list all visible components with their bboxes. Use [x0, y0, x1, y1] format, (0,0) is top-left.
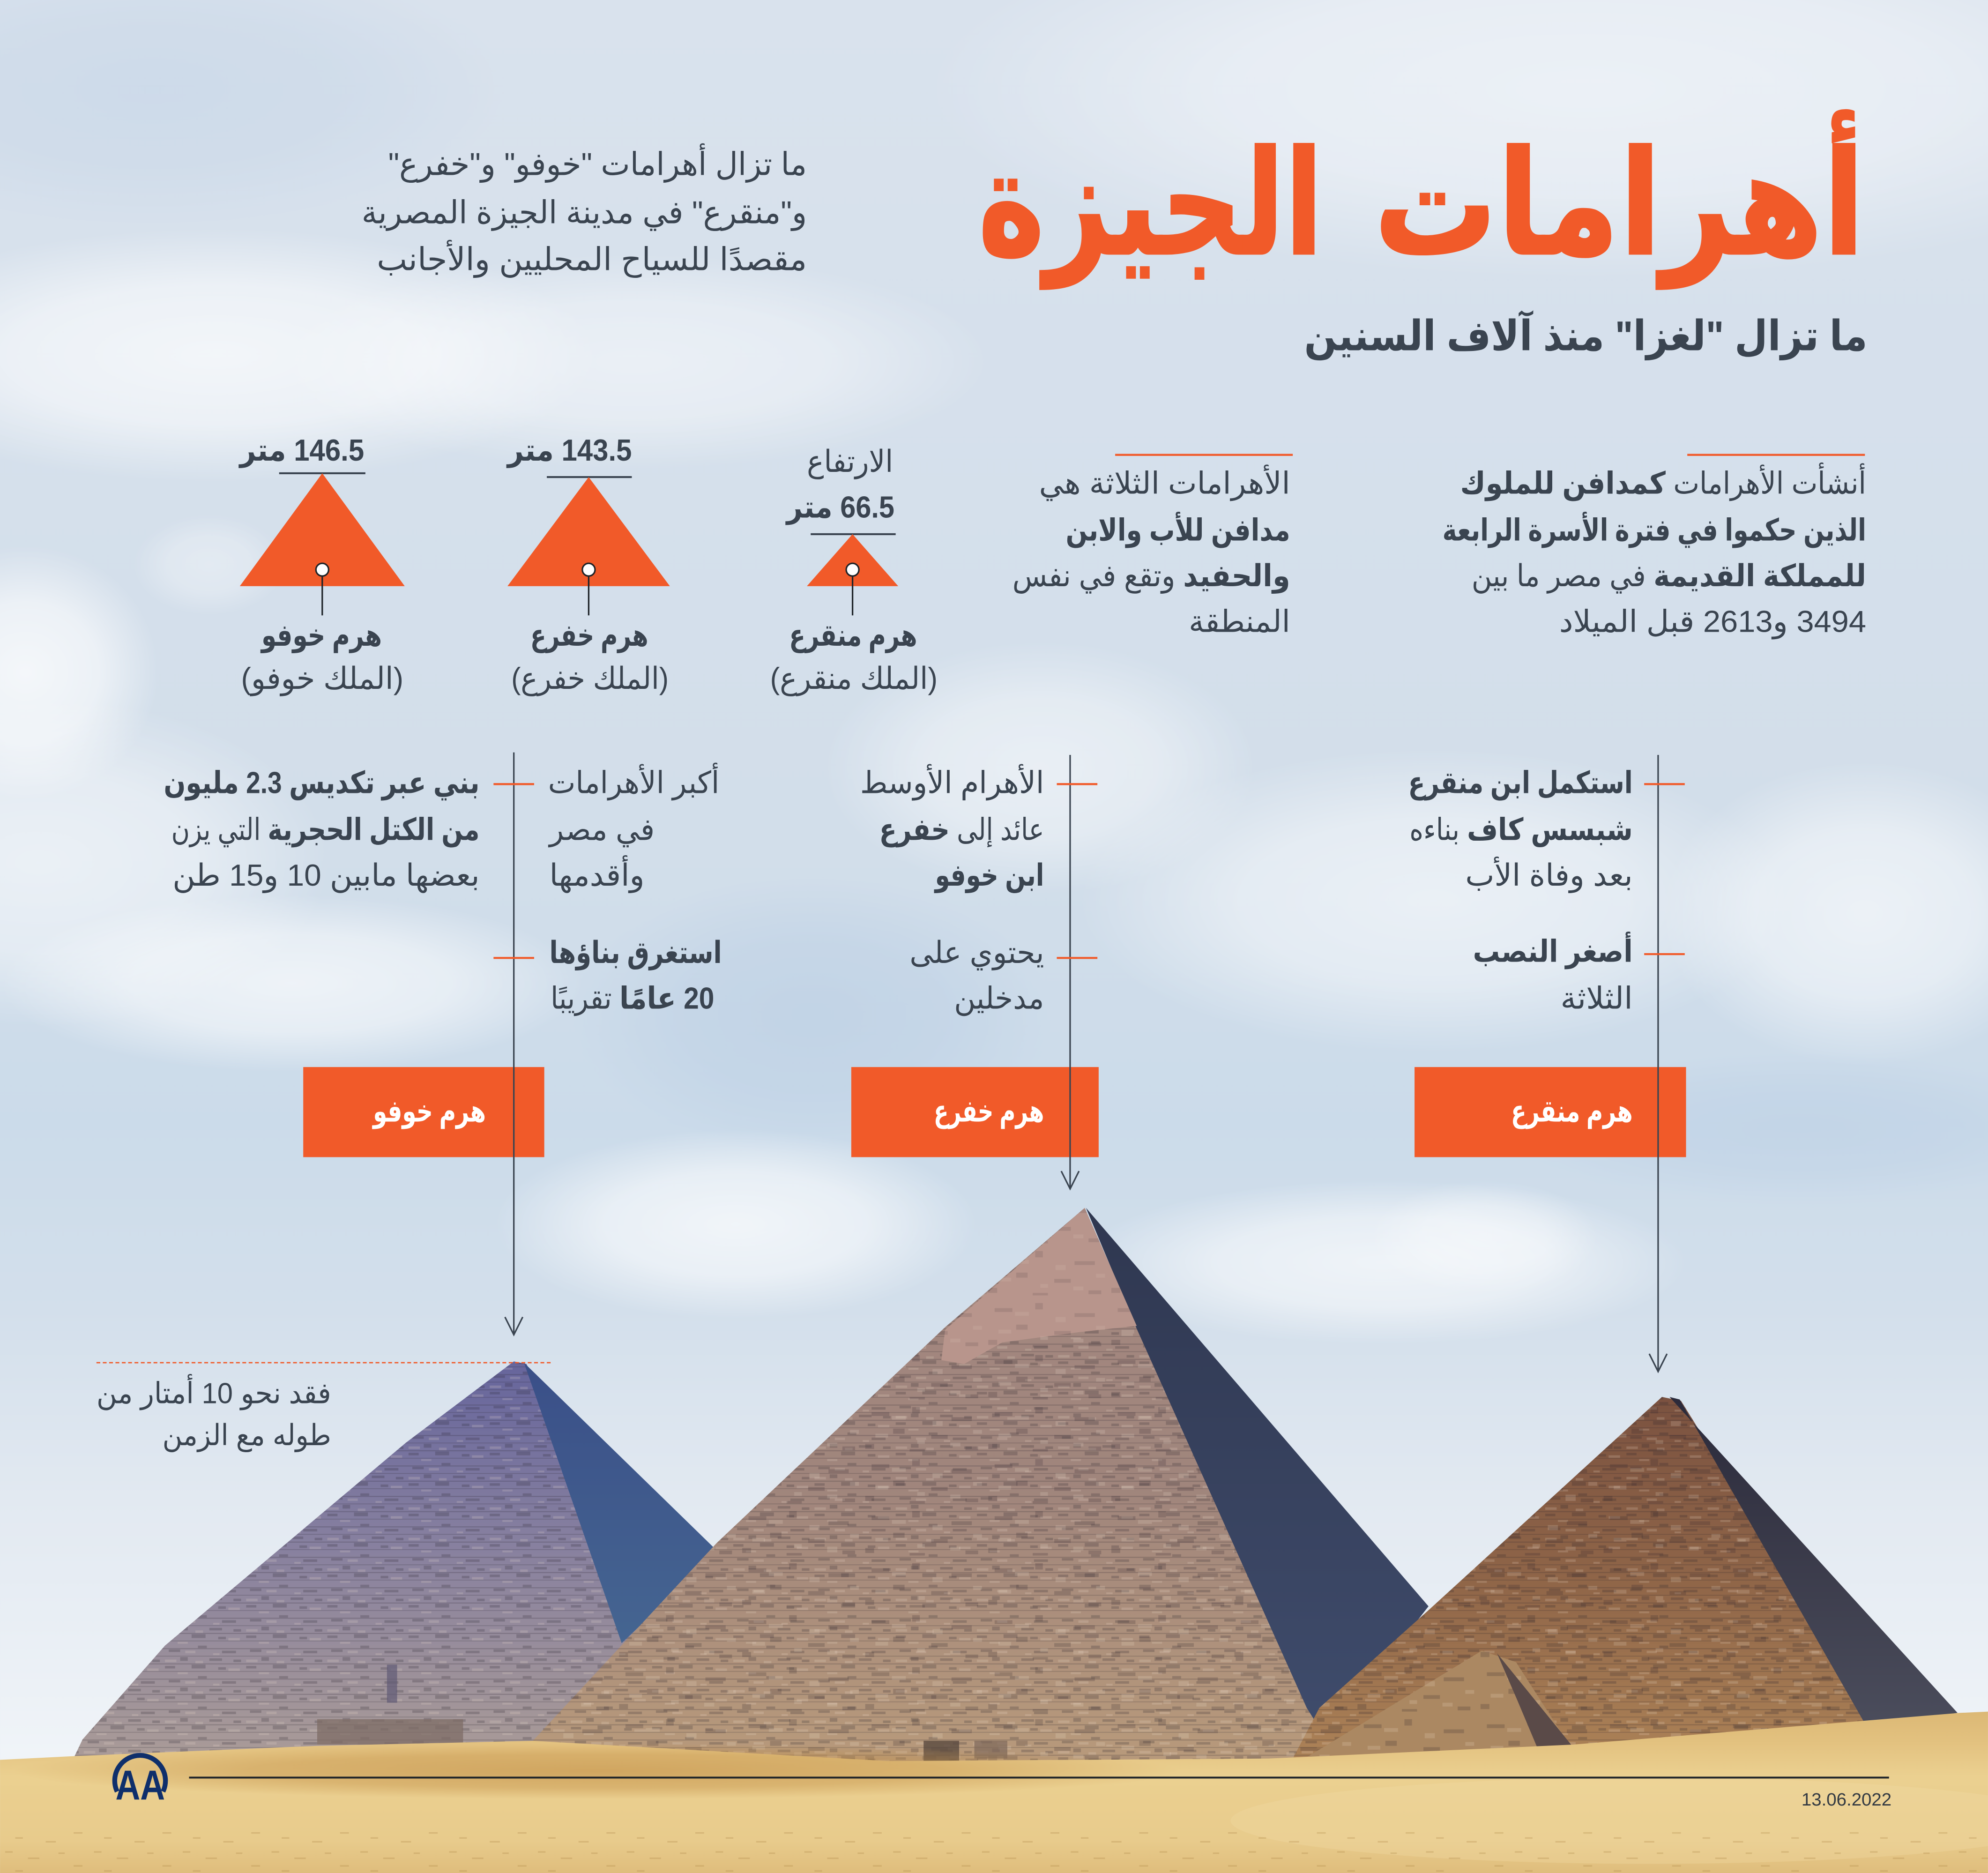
text block: tombs of father, son and grandson: الأهرامات الثلاثة هي: [1039, 464, 1290, 501]
illustration: queen pyramid: [1307, 1651, 1573, 1757]
height chart: Khafre: 143.5 متر: [506, 433, 632, 468]
text block: origin of the pyramids: [1443, 455, 1866, 639]
title: أهرامات: [1374, 109, 1865, 290]
fact: middle pyramid: [860, 763, 1044, 1016]
height chart: Menkaure: 66.5 متر: [785, 490, 894, 525]
height chart: Menkaure: هرم منقرع: [789, 618, 917, 653]
height chart: Khufu: (الملك خوفو): [241, 661, 403, 696]
text block: origin of the pyramids: للمملكة القديمة في مصر ما بين: [1472, 559, 1866, 594]
label box: Khafre: [851, 1067, 1099, 1157]
fact: largest and oldest: [548, 762, 722, 1016]
intro text: مقصدًا للسياح المحليين والأجانب: [377, 240, 807, 278]
height chart: Khafre: هرم خفرع: [530, 618, 648, 653]
fact: middle pyramid: مدخلين: [954, 981, 1044, 1016]
fact: construction stones: بني عبر تكديس 2.3 مليون: [164, 765, 480, 800]
label box: Menkaure: هرم منقرع: [1511, 1094, 1633, 1129]
fact: middle pyramid: يحتوي على: [909, 935, 1044, 970]
callout: lost height of Khufu: فقد نحو 10 أمتار من: [97, 1374, 331, 1410]
text block: tombs of father, son and grandson: مدافن للأب والابن: [1065, 511, 1290, 548]
fact: middle pyramid: الأهرام الأوسط: [860, 763, 1044, 800]
icon: AA logo: AA: [115, 1761, 165, 1808]
height chart: Khufu: 146.5 متر: [238, 433, 364, 468]
text block: tombs of father, son and grandson: المنطقة: [1189, 604, 1290, 638]
fact: largest and oldest: وأقدمها: [549, 855, 645, 893]
height chart: Menkaure: الارتفاع: [807, 444, 893, 479]
callout column: Khafre: [851, 755, 1099, 1189]
fact: largest and oldest: في مصر: [548, 812, 655, 847]
fact: construction stones: من الكتل الحجرية التي يزن: [171, 812, 480, 847]
fact: completed by the son: بعد وفاة الأب: [1465, 856, 1633, 893]
fact: completed by the son: أصغر النصب: [1473, 931, 1633, 969]
fact: construction stones: [164, 765, 480, 893]
arrow: Menkaure: [1649, 755, 1667, 1372]
subtitle: ما تزال "لغزا" منذ آلاف السنين: [1304, 310, 1868, 360]
fact: largest and oldest: استغرق بناؤها: [549, 935, 722, 970]
height chart: Menkaure: (الملك منقرع): [770, 661, 938, 696]
illustration: Khafre pyramid: [527, 1208, 1429, 1766]
title: الجيزة: [978, 124, 1323, 290]
label box: Khafre: هرم خفرع: [934, 1094, 1044, 1129]
footer rule: [189, 1777, 1889, 1778]
height chart: Khafre: [506, 433, 670, 696]
fact: completed by the son: [1408, 765, 1633, 1015]
intro text: [362, 143, 807, 278]
text block: origin of the pyramids: الذين حكموا في فترة الأسرة الرابعة: [1443, 512, 1866, 548]
text block: origin of the pyramids: 3494 و2613 قبل الميلاد: [1559, 604, 1866, 639]
intro text: ما تزال أهرامات "خوفو" و"خفرع": [388, 143, 807, 183]
fact: construction stones: بعضها مابين 10 و15 طن: [172, 858, 480, 893]
height chart: Menkaure: [770, 444, 938, 696]
label box: Khufu: هرم خوفو: [372, 1094, 486, 1129]
illustration: Menkaure pyramid: [1291, 1397, 1958, 1761]
illustration: sand dunes: [0, 1712, 1988, 1873]
callout: lost height of Khufu: طوله مع الزمن: [163, 1419, 331, 1453]
fact: middle pyramid: عائد إلى خفرع: [879, 812, 1044, 847]
fact: completed by the son: استكمل ابن منقرع: [1408, 765, 1633, 800]
arrow: Khafre: [1061, 755, 1079, 1189]
text block: tombs of father, son and grandson: والحفيد وتقع في نفس: [1013, 559, 1290, 594]
fact: largest and oldest: 20 عامًا تقريبًا: [551, 981, 714, 1016]
height chart: Khufu: [238, 433, 405, 696]
callout column: Khufu: [164, 753, 722, 1335]
fact: completed by the son: شبسس كاف بناءه: [1409, 812, 1633, 847]
arrow: Khufu: [505, 753, 523, 1335]
fact: largest and oldest: أكبر الأهرامات: [548, 762, 719, 800]
date: 13.06.2022: [1802, 1790, 1891, 1810]
title: [978, 109, 1865, 290]
illustration: Khufu pyramid: [70, 1361, 718, 1766]
callout column: Menkaure: [1408, 755, 1686, 1372]
intro text: و"منقرع" في مدينة الجيزة المصرية: [362, 195, 807, 231]
text block: origin of the pyramids: أنشأت الأهرامات كمدافن للملوك: [1460, 462, 1866, 501]
text block: tombs of father, son and grandson: [1013, 455, 1293, 638]
height chart: Khafre: (الملك خفرع): [511, 661, 669, 696]
fact: completed by the son: الثلاثة: [1560, 981, 1633, 1015]
label box: Khufu: [303, 1067, 544, 1157]
height chart: Khufu: هرم خوفو: [260, 618, 382, 653]
fact: middle pyramid: ابن خوفو: [934, 858, 1044, 893]
label box: Menkaure: [1415, 1067, 1686, 1157]
callout: lost height of Khufu: [97, 1363, 553, 1453]
